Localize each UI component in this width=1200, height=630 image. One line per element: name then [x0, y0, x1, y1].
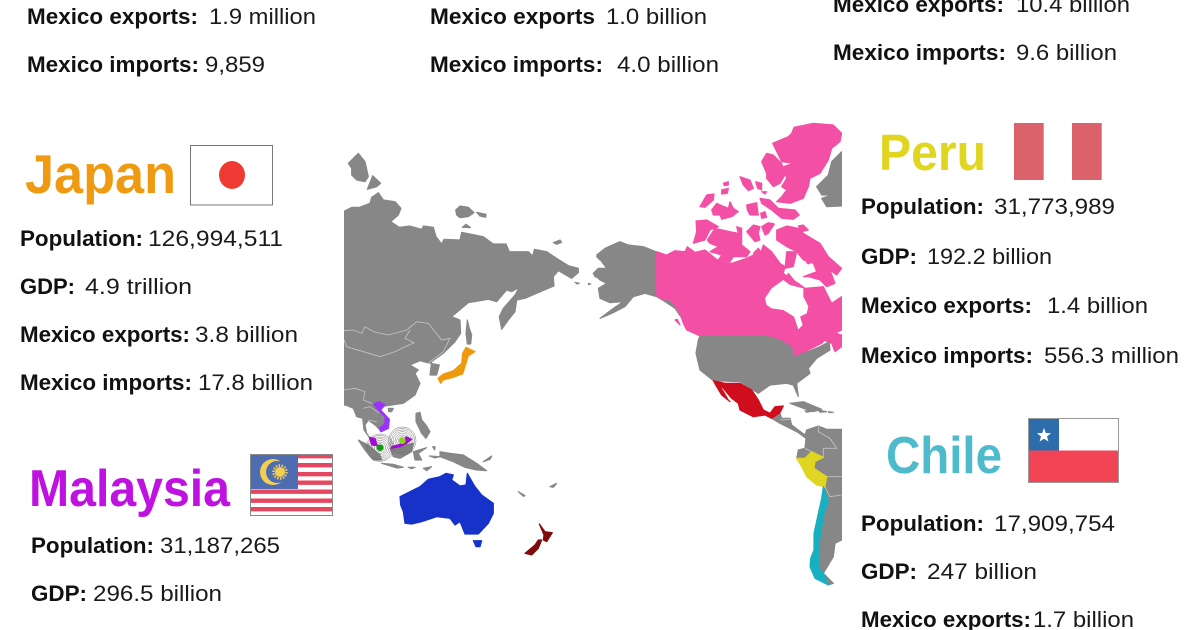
Japan on map	[438, 347, 475, 383]
Malaysia statistics: Population:	[31, 533, 154, 558]
flag: Japan	[190, 146, 272, 205]
Peru statistics: Mexico exports:	[861, 293, 1032, 318]
Hudson Bay	[765, 280, 808, 329]
Malaysia on map	[369, 437, 412, 448]
top-middle partner figures: 1.0 billion	[606, 4, 707, 29]
map: Americas	[593, 123, 842, 397]
map: Asia and western Pacific	[343, 153, 600, 555]
top-middle partner figures: Mexico exports	[430, 4, 595, 29]
map: Latin America	[713, 381, 842, 585]
heading: Malaysia: Malaysia	[29, 460, 231, 518]
Japan statistics: 4.9 trillion	[85, 274, 192, 299]
Japan statistics: 3.8 billion	[195, 322, 298, 347]
Canadian Arctic islands and Greenland	[675, 123, 842, 352]
flag: Chile	[1028, 418, 1119, 482]
top-right partner figures: 9.6 billion	[1016, 40, 1117, 65]
Russia and East Asia landmass	[343, 193, 578, 407]
Central and South America	[772, 413, 842, 585]
Singapore marker	[377, 444, 383, 451]
Chile on map	[810, 487, 828, 585]
top-left partner figures: Mexico exports:	[27, 4, 198, 29]
flag: Malaysia	[250, 454, 333, 516]
heading: Japan: Japan	[25, 143, 176, 205]
panel: Chile	[861, 418, 1134, 630]
Chile statistics: 247 billion	[927, 559, 1037, 584]
Arctic and Pacific islands	[348, 153, 600, 344]
country borders in Asia	[343, 322, 450, 363]
top-left partner figures: 1.9 million	[209, 4, 316, 29]
Japan statistics: Mexico exports:	[20, 322, 190, 347]
top-middle partner figures: Mexico imports:	[430, 52, 603, 77]
top-middle partner figures	[430, 4, 719, 77]
Peru statistics: 31,773,989	[994, 194, 1115, 219]
Malaysia statistics: GDP:	[31, 581, 87, 606]
Southeast Asia and Oceania	[343, 380, 557, 555]
Peru statistics: 1.4 billion	[1047, 293, 1148, 318]
Peru statistics: 192.2 billion	[927, 244, 1052, 269]
Peru statistics: 556.3 million	[1044, 343, 1179, 368]
Chile statistics: GDP:	[861, 559, 917, 584]
world map centred on the Pacific	[343, 123, 842, 585]
panel: Japan	[20, 143, 313, 395]
panel: Peru	[861, 123, 1179, 368]
top-middle partner figures: 4.0 billion	[617, 52, 719, 77]
United States	[696, 336, 830, 397]
Japan statistics	[20, 226, 313, 395]
Canada mainland	[657, 245, 842, 357]
Japan statistics: Mexico imports:	[20, 370, 192, 395]
Peru statistics: GDP:	[861, 244, 917, 269]
Peru statistics: Population:	[861, 194, 984, 219]
Chile statistics: Population:	[861, 511, 984, 536]
Chile statistics: 17,909,754	[994, 511, 1115, 536]
Japan statistics: GDP:	[20, 274, 75, 299]
top-right partner figures	[833, 0, 1130, 65]
top-left partner figures: 9,859	[205, 52, 265, 77]
Brunei marker	[399, 437, 406, 444]
South American borders	[780, 419, 842, 497]
Malaysia statistics	[31, 533, 280, 606]
Peru statistics	[861, 194, 1179, 368]
Japan statistics: 126,994,511	[148, 226, 283, 251]
Mexico on map	[713, 381, 783, 418]
Malaysia statistics: 296.5 billion	[93, 581, 222, 606]
top-left partner figures	[27, 4, 316, 77]
heading: Chile: Chile	[886, 427, 1002, 485]
Alaska	[593, 242, 681, 318]
small-state location rings	[366, 427, 416, 461]
Japan statistics: Population:	[20, 226, 143, 251]
Caribbean islands	[790, 402, 833, 413]
Peru on map	[797, 452, 827, 487]
Malaysia statistics: 31,187,265	[160, 533, 280, 558]
Indochina	[346, 404, 390, 438]
New Zealand on map	[525, 524, 552, 555]
top-right partner figures: Mexico imports:	[833, 40, 1006, 65]
Australia on map	[400, 473, 493, 547]
panel: Malaysia	[29, 454, 333, 606]
Vietnam on map	[373, 402, 389, 432]
heading: Peru: Peru	[879, 124, 986, 181]
Iceland-side landmass at right edge	[817, 152, 842, 207]
flag: Peru	[1014, 123, 1102, 180]
islands of Indonesia, Philippines and New Guinea	[358, 408, 557, 496]
top-left partner figures: Mexico imports:	[27, 52, 199, 77]
Japan statistics: 17.8 billion	[198, 370, 313, 395]
Chile statistics	[861, 511, 1134, 630]
Peru statistics: Mexico imports:	[861, 343, 1033, 368]
